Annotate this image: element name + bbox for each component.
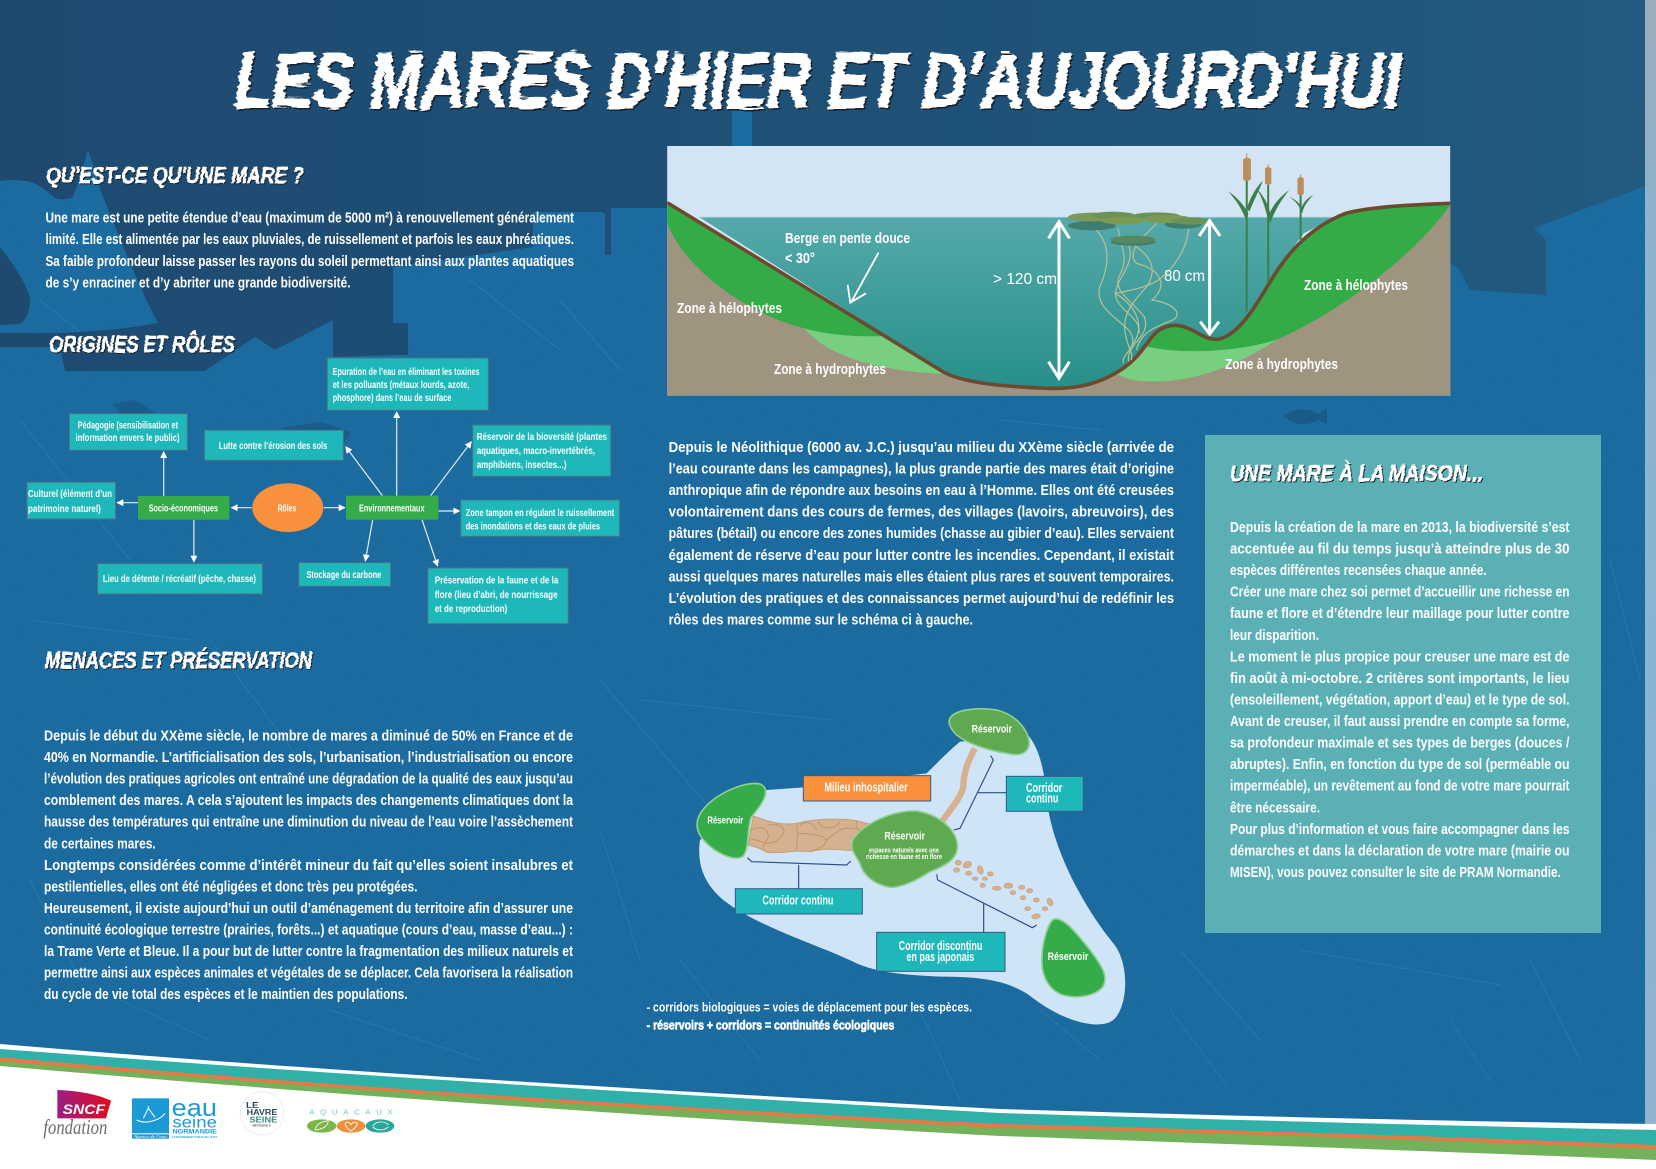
reservoir: bottom right: Réservoir bbox=[1048, 951, 1089, 963]
pond labels: < 30° bbox=[785, 251, 815, 267]
box: zone tampon: Zone tampon en régulant le ruissellement bbox=[466, 507, 615, 519]
panel text: espèces différentes recensées chaque année. bbox=[1230, 562, 1487, 579]
text block: menaces: continuité écologique terrestre (prairies, forêts...) et aquatique (cours d’eau, masse d’eau...) : bbox=[44, 922, 573, 938]
label: corridor continu left: Corridor continu bbox=[762, 893, 833, 908]
pond labels: Zone à hélophytes bbox=[1304, 278, 1408, 294]
box: épuration: et les polluants (métaux lourds, azote, bbox=[333, 379, 469, 391]
box: culturel bbox=[27, 482, 116, 519]
text block: histoire: rôles des mares comme sur le schéma ci à gauche. bbox=[669, 612, 973, 628]
hydrophyte zone right bbox=[1117, 339, 1278, 382]
logo: aquacaux: AQUACAUX bbox=[309, 1108, 393, 1117]
hydrophyte zone left bbox=[804, 328, 945, 374]
text block: menaces: pestilentielles, elles ont été négligées et donc très peu protégées. bbox=[44, 878, 418, 895]
reservoir: centre: richesse en faune et en flore bbox=[866, 854, 942, 861]
reservoir: top: Réservoir bbox=[972, 724, 1012, 736]
panel text: Pour plus d’information et vous faire accompagner dans les bbox=[1230, 821, 1570, 838]
brackets bbox=[747, 756, 1037, 932]
text block: menaces: permettre ainsi aux espèces animales et végétales de se déplacer. Cela favorisera la réalisation bbox=[44, 965, 573, 982]
box: pédagogie: Pédagogie (sensibilisation et bbox=[78, 419, 178, 431]
logo: eau seine normandie: Agence de l’eau bbox=[133, 1135, 167, 1139]
box: zone tampon: des inondations et des eaux de pluies bbox=[466, 520, 600, 532]
text block: menaces: Heureusement, il existe aujourd’hui un outil d’aménagement du territoire afin d’assurer une bbox=[44, 900, 573, 917]
box: environnementaux: Environnementaux bbox=[359, 502, 425, 514]
label: corridor discontinu: Corridor discontinu bbox=[899, 938, 982, 953]
text block: menaces: la Trame Verte et Bleue. Il a pour but de lutter contre la fragmentation des milieux naturels et bbox=[44, 943, 573, 960]
reservoir: left: Réservoir bbox=[707, 815, 743, 826]
heading: menaces et préservation: MENACES ET PRÉSERVATION bbox=[45, 646, 312, 673]
panel text: accentuée au fil du temps jusqu’à atteindre plus de 30 bbox=[1230, 541, 1570, 558]
pond labels: Zone à hélophytes bbox=[677, 301, 782, 317]
text block: histoire: aussi quelques mares naturelles mais elles étaient plus rares et souvent temporaires. bbox=[669, 568, 1174, 585]
text block: histoire: l’eau courante dans les campagnes), la plus grande partie des mares était d’origine bbox=[669, 461, 1174, 478]
text block: histoire: anthropique afin de répondre aux besoins en eau à l’Homme. Elles ont été creusées bbox=[669, 482, 1174, 499]
panel text: sa profondeur maximale et ses types de berges (douces / bbox=[1230, 735, 1570, 752]
text block: menaces: comblement des mares. A cela s’ajoutent les impacts des changements climatiques dont la bbox=[44, 792, 574, 809]
label: corridor continu right: continu bbox=[1026, 791, 1058, 806]
logos bbox=[43, 1090, 394, 1139]
logo: SNCF fondation: fondation bbox=[43, 1117, 107, 1139]
label: corridor discontinu bbox=[877, 932, 1005, 971]
text block: menaces: hausse des températures qui entraîne une diminution du niveau de l’eau voire l’assèchement bbox=[44, 814, 573, 831]
text block: histoire: Depuis le Néolithique (6000 av. J.C.) jusqu’au milieu du XXème siècle (arrivée de bbox=[669, 439, 1174, 456]
panel text: fin août à mi-octobre. 2 critères sont importants, le lieu bbox=[1230, 670, 1570, 687]
label: corridor continu right: Corridor bbox=[1026, 780, 1062, 795]
box: préservation: flore (lieu d’abri, de nourrissage bbox=[435, 589, 558, 601]
logo: le havre seine métropole: SEINE bbox=[249, 1115, 278, 1125]
panel text: faune et flore et d’étendre leur maillage pour lutter contre bbox=[1230, 605, 1570, 622]
panel text bbox=[1230, 519, 1570, 881]
box: stockage du carbone bbox=[299, 563, 391, 586]
panel text: être nécessaire. bbox=[1230, 799, 1320, 816]
text block: definition: limité. Elle est alimentée par les eaux pluviales, de ruissellement et parfois les eaux phréatiques. bbox=[46, 231, 574, 248]
slope arrow bbox=[848, 253, 879, 303]
label: milieu inhospitalier: Milieu inhospitalier bbox=[824, 780, 908, 795]
box: culturel: Culturel (élément d’un bbox=[28, 488, 112, 500]
text block: menaces: Longtemps considérées comme d’intérêt mineur du fait qu’elles soient insalubres et bbox=[44, 857, 573, 874]
map notes bbox=[647, 1000, 972, 1032]
text block: menaces: Depuis le début du XXème siècle, le nombre de mares a diminué de 50% en France et de bbox=[44, 728, 573, 744]
aquatic plant stems bbox=[1095, 223, 1189, 363]
logo: le havre seine métropole: MÉTROPOLE bbox=[252, 1123, 271, 1128]
panel text: imperméable), un revêtement au fond de votre mare pourrait bbox=[1230, 778, 1570, 795]
ecological corridors map bbox=[647, 709, 1125, 1032]
box: réservoir de biodiversité: aquatiques, macro-invertébrés, bbox=[477, 445, 595, 457]
pond labels: 80 cm bbox=[1164, 268, 1205, 285]
heading: qu'est-ce qu'une mare: QU'EST-CE QU'UNE MARE ? bbox=[46, 162, 304, 188]
text block: histoire bbox=[669, 439, 1174, 628]
reservoir: centre: Réservoir bbox=[884, 830, 925, 842]
label: corridor discontinu: en pas japonais bbox=[906, 949, 974, 964]
box: réservoir de biodiversité bbox=[473, 425, 611, 476]
text block: menaces: l’évolution des pratiques agricoles ont entraîné une dégradation de la qualité des eaux jusqu’au bbox=[44, 771, 573, 788]
text block: menaces: de certaines mares. bbox=[44, 835, 156, 852]
reservoir: left bbox=[697, 784, 766, 858]
pond labels: Zone à hydrophytes bbox=[774, 362, 886, 378]
text block: histoire: volontairement dans des cours de fermes, des villages (lavoirs, abreuvoirs), des bbox=[669, 504, 1174, 521]
pond labels: > 120 cm bbox=[993, 271, 1057, 288]
text block: definition bbox=[46, 210, 574, 292]
text block: histoire: également de réserve d’eau pour lutter contre les incendies. Cependant, il existait bbox=[669, 547, 1174, 564]
heading: une mare à la maison: UNE MARE À LA MAISON... bbox=[1230, 459, 1483, 486]
box: lutte contre l'érosion bbox=[204, 430, 343, 460]
logo: SNCF fondation bbox=[43, 1090, 111, 1139]
text block: menaces bbox=[44, 728, 574, 1003]
panel text: abruptes). Enfin, en fonction du type de sol (perméable ou bbox=[1230, 756, 1570, 773]
label: corridor continu right bbox=[1006, 776, 1083, 811]
text block: definition: Une mare est une petite étendue d’eau (maximum de 5000 m²) à renouvellement généralement bbox=[46, 210, 574, 226]
label: milieu inhospitalier bbox=[803, 776, 931, 801]
logo: aquacaux bbox=[307, 1108, 394, 1133]
box: préservation: Préservation de la faune et de la bbox=[435, 575, 559, 587]
bottom band bbox=[0, 1044, 1656, 1169]
pond labels: Zone à hydrophytes bbox=[1225, 357, 1338, 373]
panel text: leur disparition. bbox=[1230, 627, 1319, 644]
reservoir: top bbox=[949, 709, 1029, 755]
territory blob bbox=[699, 737, 1125, 1024]
panel text: MISEN), vous pouvez consulter le site de PRAM Normandie. bbox=[1230, 864, 1561, 881]
box: culturel: patrimoine naturel) bbox=[28, 503, 101, 515]
node: rôles: Rôles bbox=[278, 502, 296, 514]
flow chart: roles of ponds bbox=[27, 358, 620, 624]
box: préservation bbox=[428, 568, 568, 624]
box: lieu de détente bbox=[98, 564, 262, 594]
box: zone tampon bbox=[461, 500, 620, 536]
map notes: - réservoirs + corridors = continuités écologiques bbox=[647, 1017, 894, 1032]
green zone left bbox=[667, 205, 883, 337]
water lilies bbox=[1068, 212, 1210, 246]
box: socio-économiques bbox=[138, 496, 229, 520]
cattails bbox=[1228, 153, 1313, 312]
text block: definition: Sa faible profondeur laisse passer les rayons du soleil permettant ainsi aux plantes aquatiques bbox=[46, 253, 574, 270]
box: environnementaux bbox=[346, 496, 438, 520]
panel text: Le moment le plus propice pour creuser une mare est de bbox=[1230, 648, 1570, 665]
reservoir: centre bbox=[852, 811, 957, 887]
text block: definition: de s’y enraciner et d’y abriter une grande biodiversité. bbox=[46, 274, 350, 292]
box: pédagogie bbox=[69, 414, 187, 450]
box: épuration: phosphore) dans l’eau de surface bbox=[333, 392, 452, 404]
box: épuration: Epuration de l’eau en éliminant les toxines bbox=[333, 366, 480, 378]
panel text: Depuis la création de la mare en 2013, la biodiversité s’est bbox=[1230, 519, 1570, 536]
logo: eau seine normandie bbox=[132, 1095, 218, 1139]
panel: une mare à la maison bbox=[1205, 435, 1601, 933]
logo: eau seine normandie: seine bbox=[172, 1115, 217, 1132]
continuous corridor: left bbox=[748, 816, 872, 853]
box: réservoir de biodiversité: Réservoir de la bioversité (plantes bbox=[477, 431, 607, 443]
arrows bbox=[117, 412, 471, 566]
box: socio-économiques: Socio-économiques bbox=[149, 502, 218, 514]
box: lieu de détente: Lieu de détente / récréatif (pêche, chasse) bbox=[103, 573, 256, 585]
node: rôles bbox=[252, 483, 323, 532]
text block: menaces: du cycle de vie total des espèces et le maintien des populations. bbox=[44, 986, 408, 1003]
text block: histoire: pâtures (bétail) ou encore des zones humides (chasse au gibier d’eau). Elles servaient bbox=[669, 525, 1174, 542]
bank line bbox=[667, 203, 1450, 388]
heading: origines et roles: ORIGINES ET RÔLES bbox=[49, 330, 236, 357]
pond labels bbox=[677, 231, 1408, 378]
box: pédagogie: information envers le public) bbox=[76, 432, 180, 444]
logo: le havre seine métropole bbox=[240, 1092, 284, 1135]
logo: eau seine normandie: NORMANDIE bbox=[172, 1128, 218, 1135]
continuous corridor: top bbox=[943, 748, 975, 821]
label: corridor continu left bbox=[735, 889, 862, 914]
discontinuous corridor: stepping stones bbox=[954, 860, 1054, 919]
panel text: (ensoleillement, végétation, apport d’eau) et le type de sol. bbox=[1230, 692, 1570, 708]
reservoir: bottom right bbox=[1042, 919, 1105, 997]
logo: le havre seine métropole: LE bbox=[246, 1100, 259, 1110]
box: lutte contre l'érosion: Lutte contre l’érosion des sols bbox=[219, 440, 327, 452]
reservoir: centre: espaces naturels avec une bbox=[869, 847, 939, 854]
box: stockage du carbone: Stockage du carbone bbox=[306, 569, 381, 581]
logo: le havre seine métropole: HAVRE bbox=[247, 1107, 278, 1117]
green zone right bbox=[1147, 205, 1450, 351]
map notes: - corridors biologiques = voies de déplacement pour les espèces. bbox=[647, 1000, 972, 1015]
text block: menaces: 40% en Normandie. L’artificialisation des sols, l’urbanisation, l’industrialisation ou encore bbox=[44, 749, 573, 766]
logo: eau seine normandie: eau bbox=[172, 1095, 217, 1122]
logo: SNCF fondation: SNCF bbox=[63, 1101, 105, 1117]
panel text: Créer une mare chez soi permet d’accueillir une richesse en bbox=[1230, 584, 1570, 601]
pond cross-section diagram bbox=[667, 146, 1450, 396]
pond shapes bbox=[667, 146, 1450, 396]
box: réservoir de biodiversité: amphibiens, insectes...) bbox=[477, 459, 566, 471]
logo: eau seine normandie: ÉTABLISSEMENT PUBLIC DE L’ÉTAT bbox=[172, 1134, 217, 1139]
text block: histoire: L’évolution des pratiques et des connaissances permet aujourd’hui de redéfinir les bbox=[669, 590, 1174, 607]
panel text: démarches et dans la déclaration de votre mare (mairie ou bbox=[1230, 842, 1570, 859]
box: préservation: et de reproduction) bbox=[435, 603, 507, 615]
box: épuration bbox=[327, 358, 488, 410]
depth arrows bbox=[1049, 221, 1220, 378]
panel text: Avant de creuser, il faut aussi prendre en compte sa forme, bbox=[1230, 713, 1570, 730]
pond labels: Berge en pente douce bbox=[785, 231, 910, 247]
